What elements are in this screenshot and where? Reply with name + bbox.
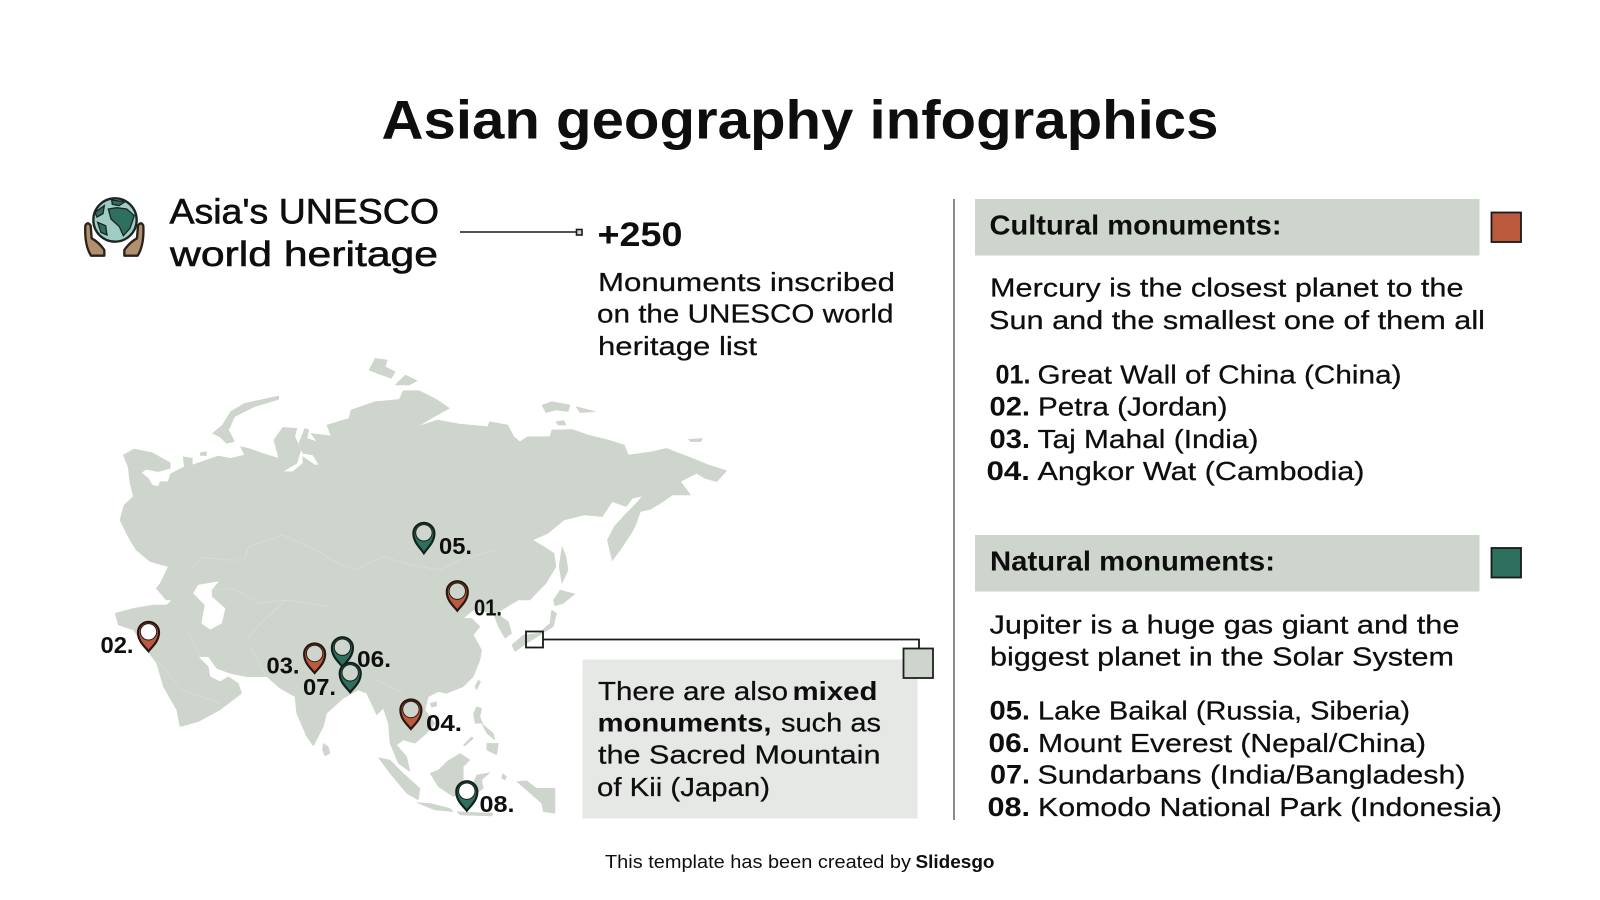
statistic: +250: +250 <box>598 216 682 254</box>
map pin labels: 08. <box>480 791 514 817</box>
connector: heading to statistic <box>460 230 582 235</box>
heading: Asia's UNESCO world heritage: world heritage <box>169 235 438 274</box>
callout marker square <box>904 648 933 678</box>
map pin labels <box>100 533 514 817</box>
pin 06 <box>332 637 353 667</box>
legend swatch: natural <box>1492 548 1521 578</box>
title: Asian geography infographics <box>382 88 1218 150</box>
list: cultural monuments: Angkor Wat (Cambodia) <box>1038 456 1364 486</box>
list: cultural monuments: 03. <box>990 424 1030 454</box>
icon: globe held by hands <box>85 198 143 256</box>
description: natural <box>990 610 1460 672</box>
panel: cultural monuments <box>975 199 1521 486</box>
pin 03 <box>304 644 325 673</box>
list: cultural monuments <box>986 360 1402 486</box>
panel: mixed monuments callout: mixed <box>792 676 878 706</box>
description: cultural <box>989 272 1485 335</box>
panel: mixed monuments callout <box>582 660 918 818</box>
header: natural monuments: Natural monuments: <box>990 546 1275 576</box>
description: natural: Jupiter is a huge gas giant and the <box>990 610 1460 640</box>
legend swatch: cultural <box>1492 212 1521 242</box>
list: natural monuments: Sundarbans (India/Bangladesh) <box>1038 760 1466 790</box>
header: cultural monuments <box>975 199 1480 256</box>
panel: mixed monuments callout: monuments, <box>598 708 772 738</box>
header: natural monuments <box>975 535 1480 592</box>
text block: statistic description <box>597 267 895 361</box>
pin 01 <box>447 581 468 611</box>
panel: mixed monuments callout: of Kii (Japan) <box>597 772 770 802</box>
description: cultural: Mercury is the closest planet to the <box>990 272 1464 302</box>
pin 08 <box>456 781 477 811</box>
list: cultural monuments: 04. <box>986 456 1030 486</box>
list: cultural monuments: Petra (Jordan) <box>1038 392 1228 422</box>
list: natural monuments: 07. <box>990 760 1030 790</box>
description: natural: biggest planet in the Solar System <box>990 642 1454 672</box>
heading: Asia's UNESCO world heritage <box>169 192 439 274</box>
list: cultural monuments: Taj Mahal (India) <box>1038 424 1258 454</box>
callout connector: Japan to mixed monuments box <box>526 632 919 648</box>
panel: natural monuments <box>975 535 1521 822</box>
pin 02 <box>138 622 159 651</box>
list: natural monuments: 08. <box>988 792 1030 822</box>
map pin labels: 07. <box>303 674 336 700</box>
text block: statistic description: Monuments inscribed <box>598 267 895 297</box>
pin 05 <box>413 523 434 553</box>
pin 07 <box>340 663 361 692</box>
text block: statistic description: on the UNESCO world <box>597 298 894 328</box>
map pin labels: 06. <box>357 646 391 672</box>
map pin labels: 03. <box>266 652 300 678</box>
description: cultural: Sun and the smallest one of them all <box>989 305 1485 335</box>
panel: mixed monuments callout: the Sacred Mountain <box>598 740 880 770</box>
map pin labels: 04. <box>426 710 462 736</box>
list: natural monuments <box>988 696 1502 822</box>
pin 04 <box>400 700 421 729</box>
list: natural monuments: 06. <box>988 728 1030 758</box>
map pin labels: 05. <box>439 533 472 559</box>
heading: Asia's UNESCO world heritage: Asia's UNESCO <box>170 192 439 232</box>
list: cultural monuments: Great Wall of China (China) <box>1038 360 1402 390</box>
list: cultural monuments: 01. <box>996 360 1030 390</box>
footer credit: This template has been created by <box>605 852 911 872</box>
list: cultural monuments: 02. <box>990 392 1030 422</box>
header: cultural monuments: Cultural monuments: <box>990 210 1282 240</box>
text block: statistic description: heritage list <box>598 331 758 361</box>
vertical divider <box>953 199 955 820</box>
map of Asia <box>115 358 727 816</box>
footer credit: Slidesgo <box>916 852 995 872</box>
panel: mixed monuments callout: There are also <box>598 676 788 706</box>
list: natural monuments: Mount Everest (Nepal/China) <box>1038 728 1426 758</box>
map pin labels: 02. <box>100 632 134 658</box>
panel: mixed monuments callout: such as <box>781 708 881 738</box>
list: natural monuments: Komodo National Park (Indonesia) <box>1038 792 1502 822</box>
list: natural monuments: Lake Baikal (Russia, Siberia) <box>1038 696 1410 726</box>
map pin labels: 01. <box>474 594 502 620</box>
list: natural monuments: 05. <box>990 696 1030 726</box>
